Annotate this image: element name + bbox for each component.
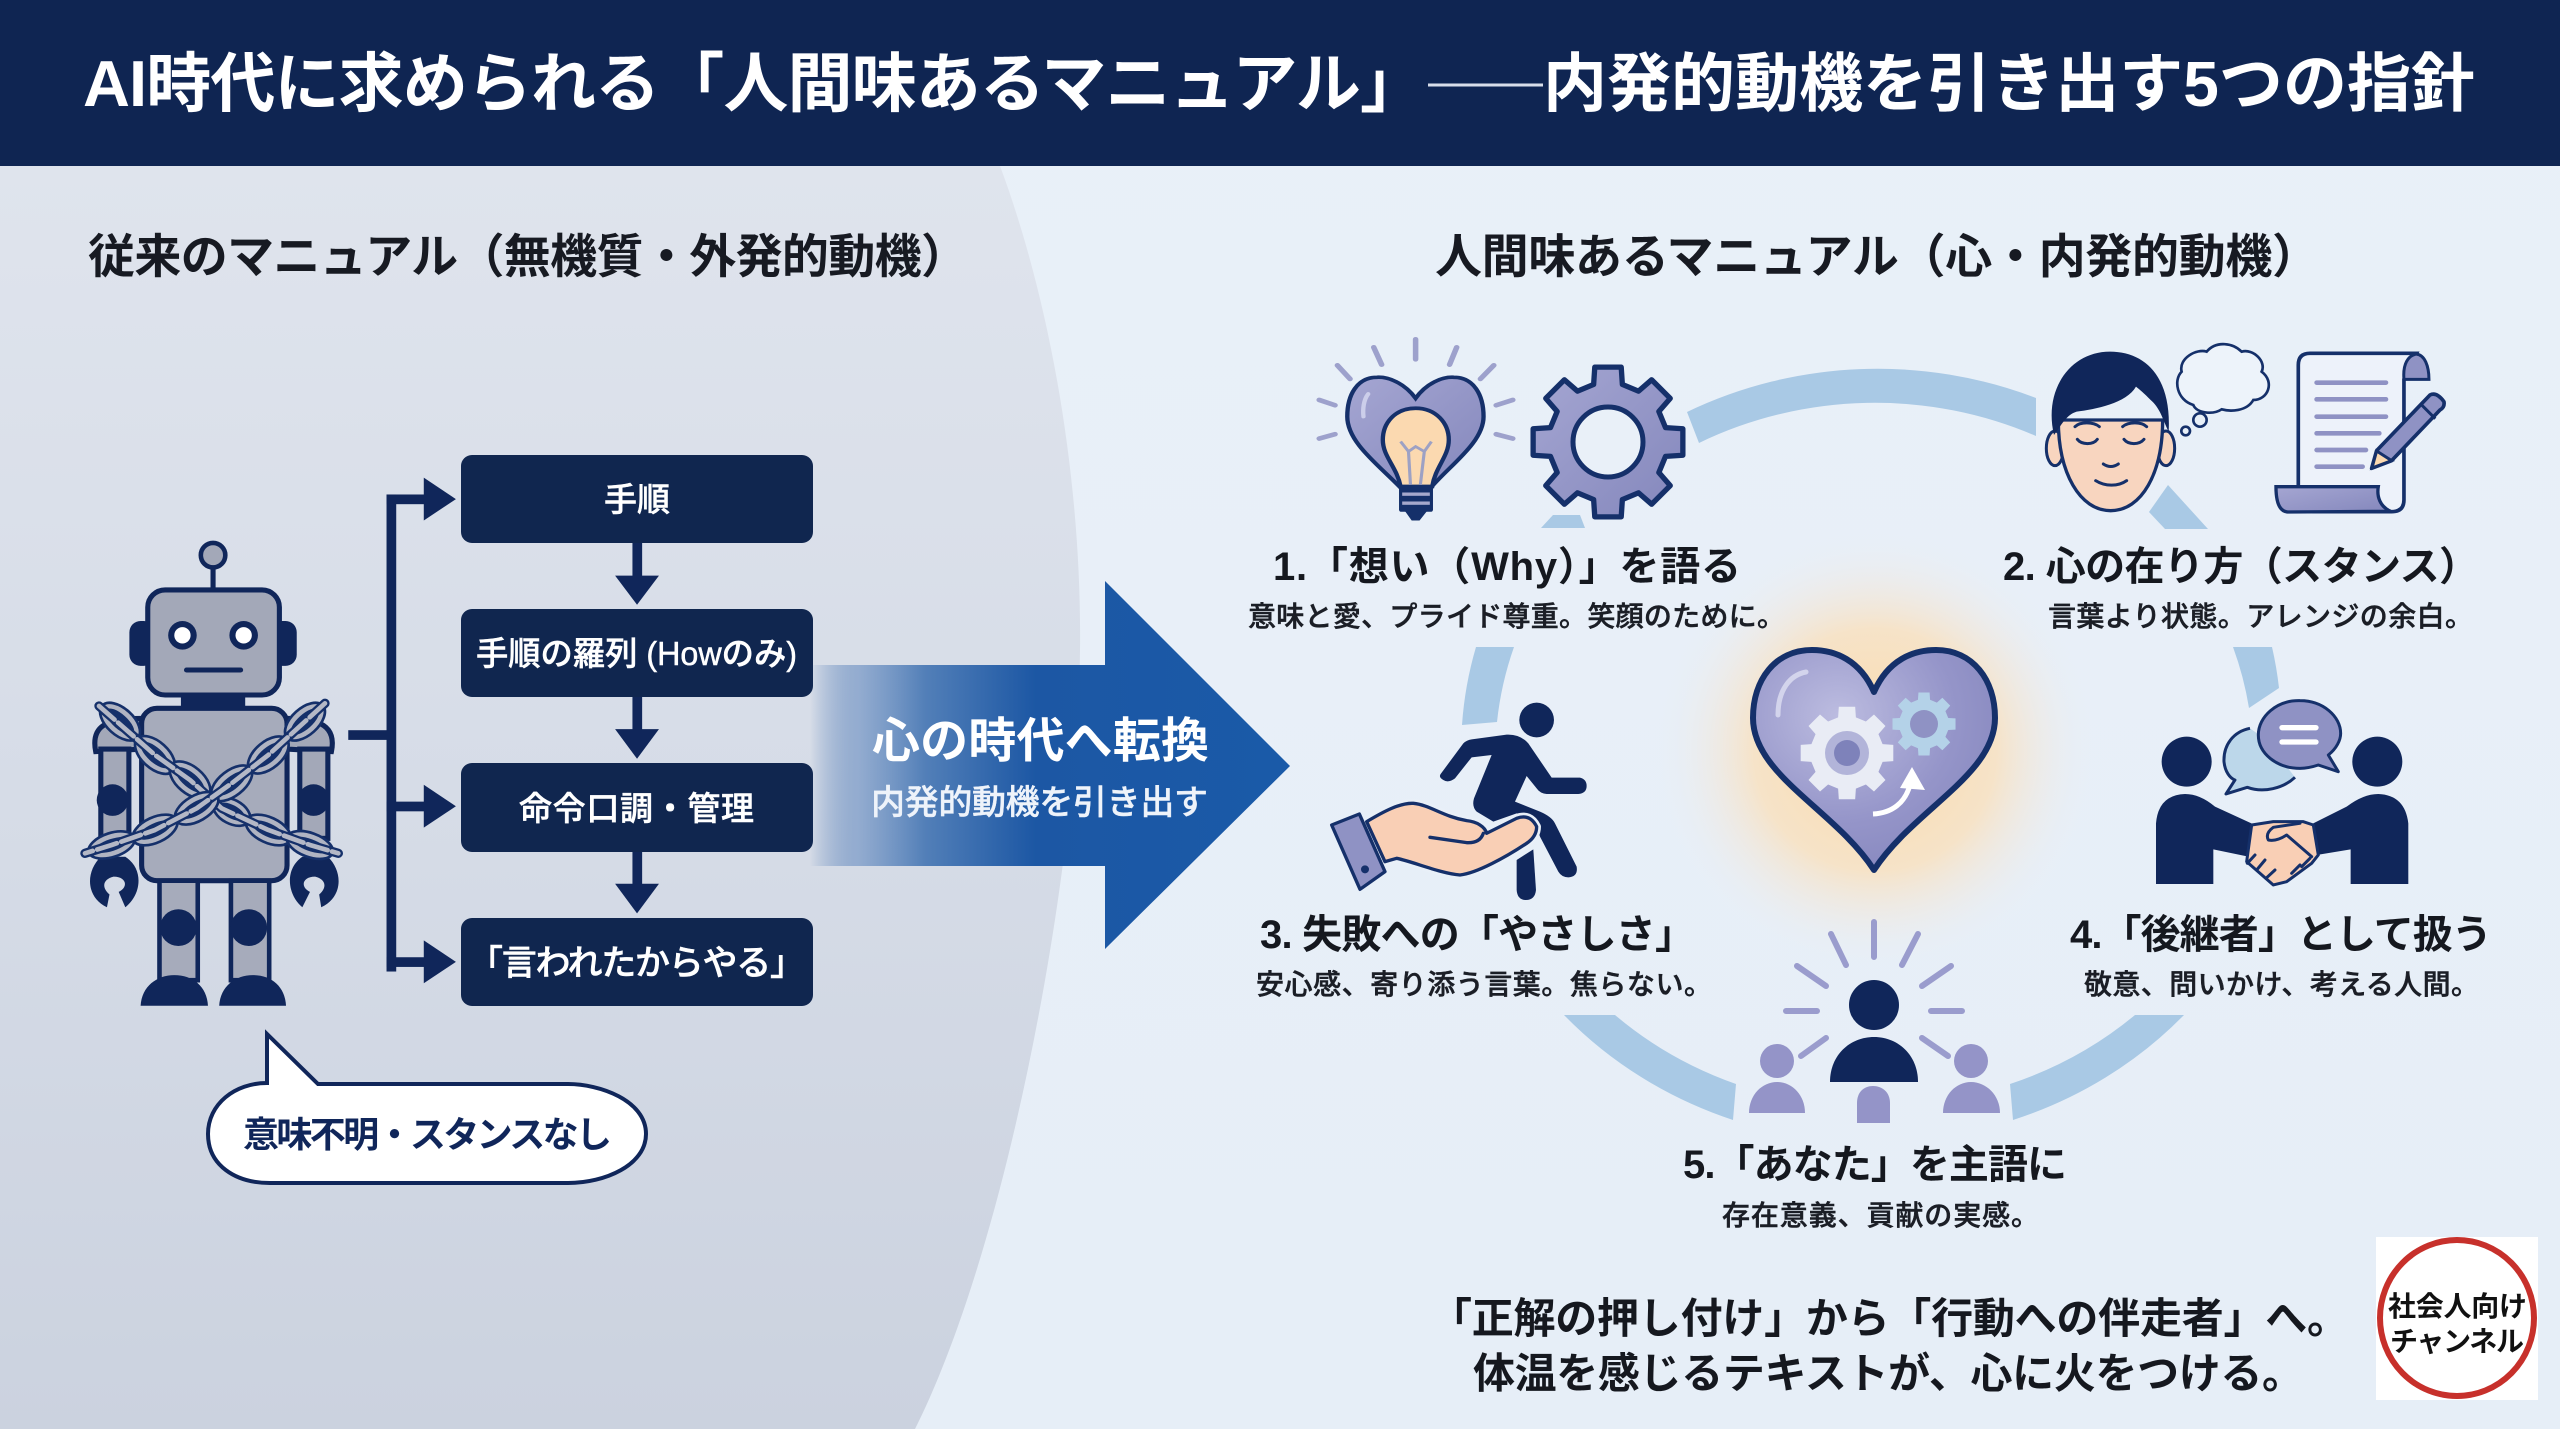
title: 内発的動機を引き出す5つの指針	[1543, 48, 2475, 120]
flow step: list of procedures	[461, 609, 813, 697]
text: item 1	[1248, 545, 1785, 632]
arrow: shift to the age of heart: 内発的動機を引き出す	[871, 784, 1208, 822]
text: item 2: 言葉より状態。アレンジの余白。	[2048, 601, 2473, 632]
callout: meaningless, no stance: 意味不明・スタンスなし	[243, 1114, 612, 1155]
flow step: procedure	[461, 455, 813, 543]
icon: central person with team	[1749, 922, 2000, 1123]
text: item 2: 2. 心の在り方（スタンス）	[2003, 545, 2479, 589]
arrow: shift to the age of heart: 心の時代へ転換	[872, 715, 1209, 768]
closing message: 体温を感じるテキストが、心に火をつける。	[1473, 1350, 2304, 1397]
flow step: list of procedures: 手順の羅列 (Howのみ)	[476, 635, 797, 672]
logo: channel stamp: 社会人向け	[2388, 1291, 2527, 1322]
icon: handshake and speech bubbles	[2156, 701, 2408, 885]
arrow: shift to the age of heart	[805, 581, 1290, 949]
text: item 3: 3. 失敗への「やさしさ」	[1260, 913, 1695, 957]
icon: heart lightbulb	[1319, 339, 1513, 520]
icon: calm face with thought bubble	[2046, 344, 2269, 511]
text: item 4: 敬意、問いかけ、考える人間。	[2084, 969, 2479, 1000]
title	[83, 47, 2475, 120]
closing message: 「正解の押し付け」から「行動への伴走者」へ。	[1430, 1295, 2349, 1342]
logo: channel stamp: チャンネル	[2390, 1326, 2524, 1357]
heading: conventional manual: 従来のマニュアル（無機質・外発的動機）	[88, 230, 968, 283]
flow step: told to do: 「言われたからやる」	[468, 944, 805, 983]
text: item 1: 意味と愛、プライド尊重。笑顔のために。	[1248, 601, 1785, 632]
text: item 3: 安心感、寄り添う言葉。焦らない。	[1256, 969, 1712, 1000]
text: item 4	[2070, 913, 2492, 1000]
panel: conventional manual background	[0, 166, 1080, 1429]
header band	[0, 0, 2560, 166]
text: item 5	[1683, 1143, 2067, 1231]
cycle ring arcs	[1462, 369, 2279, 1120]
flow step: commands	[461, 763, 813, 852]
heading: human manual: 人間味あるマニュアル（心・内発的動機）	[1435, 230, 2319, 283]
flow step: commands: 命令口調・管理	[519, 790, 754, 827]
flow step: procedure: 手順	[604, 481, 670, 518]
logo: channel stamp	[2376, 1237, 2538, 1400]
title: AI時代に求められる「人間味あるマニュアル」	[83, 47, 1425, 120]
closing message	[1430, 1295, 2349, 1397]
text: item 1: 1.「想い（Why）」を語る	[1273, 545, 1741, 589]
icon: center heart with gears	[1753, 650, 1995, 870]
text: item 2	[2003, 545, 2479, 632]
text: item 5: 5.「あなた」を主語に	[1683, 1143, 2067, 1187]
callout: meaningless, no stance	[208, 1034, 646, 1183]
text: item 3	[1256, 913, 1712, 1000]
text: item 4: 4.「後継者」として扱う	[2070, 913, 2492, 957]
center glow	[1655, 530, 2095, 970]
flow connector arrows	[348, 478, 659, 983]
icon: chained robot	[85, 543, 339, 1006]
icon: document and pencil	[2276, 353, 2444, 512]
text: item 5: 存在意義、貢献の実感。	[1722, 1200, 2039, 1231]
icon: running person and supporting hand	[1332, 703, 1587, 900]
icon: gear	[1533, 367, 1683, 517]
flow step: told to do	[461, 918, 813, 1006]
